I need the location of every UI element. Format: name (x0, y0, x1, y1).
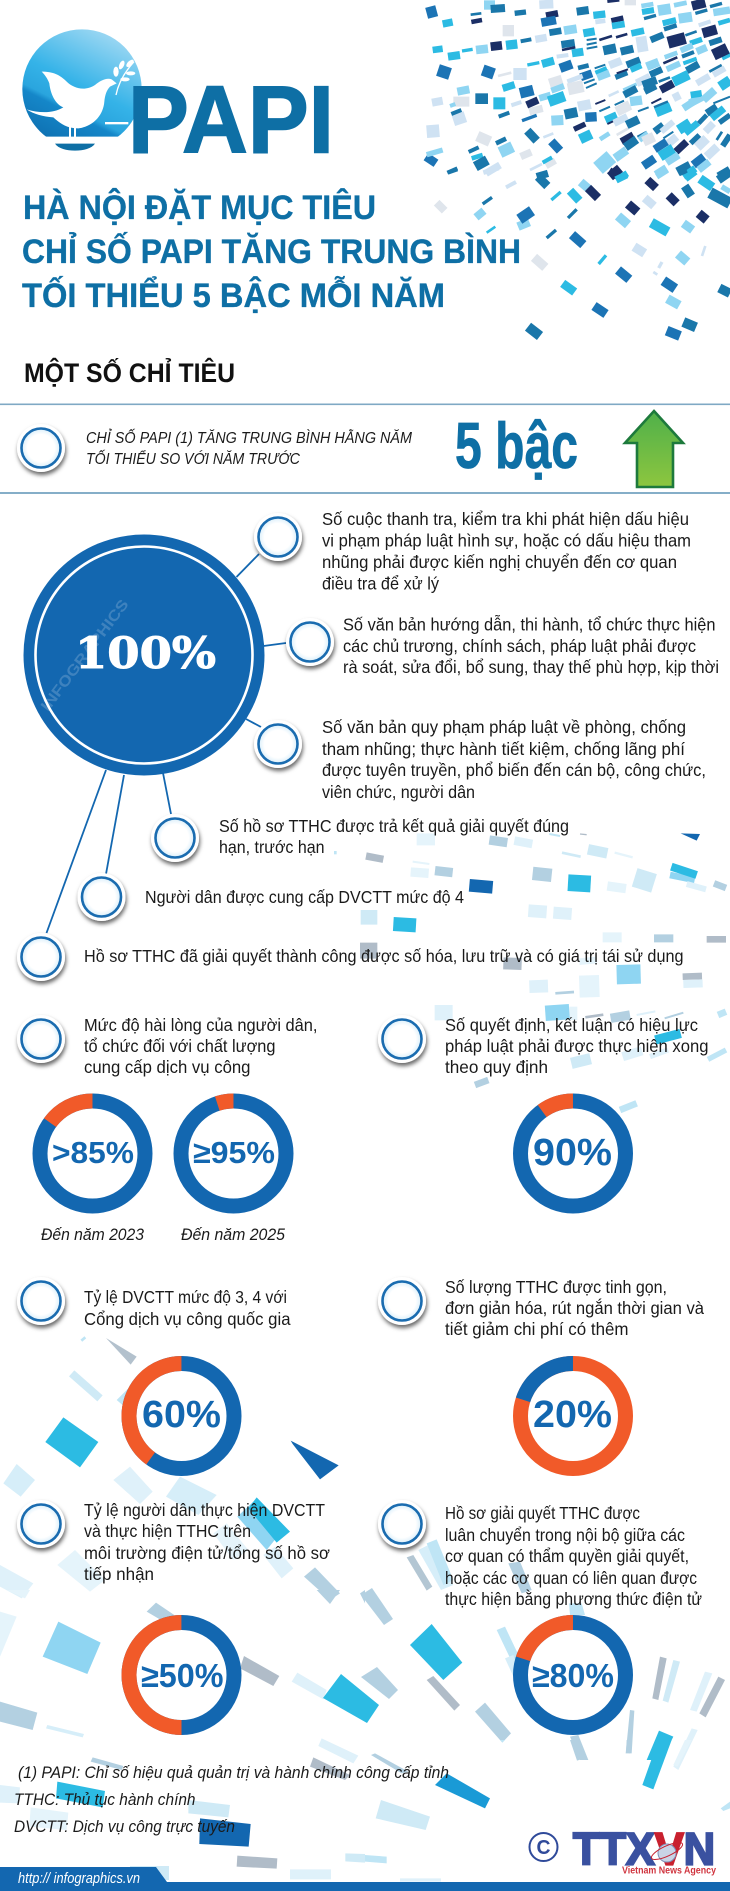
footer bar (0, 1867, 730, 1891)
text (445, 1277, 704, 1339)
icon: copyright (530, 1833, 558, 1861)
text: Hồ sơ TTHC đã giải quyết thành công được số hóa, lưu trữ và có giá trị tái sử dụng (84, 946, 684, 966)
icon: bullet (378, 1015, 426, 1063)
donut: ≥95%: ≥95% (193, 1135, 275, 1170)
text: Mức độ hài lòng của người dân, (84, 1015, 318, 1035)
background: middle pale rectangles (334, 833, 726, 1110)
text: tổ chức đối với chất lượng (84, 1036, 276, 1056)
icon: bullet (378, 1500, 426, 1548)
text: điều tra để xử lý (322, 574, 439, 594)
text: papi target: CHỈ SỐ PAPI (1) TĂNG TRUNG BÌNH HẰNG NĂM (86, 428, 413, 447)
text: cung cấp dịch vụ công (84, 1057, 250, 1077)
section heading: MỘT SỐ CHỈ TIÊU (24, 356, 235, 388)
panel: simplified procedures (378, 1277, 704, 1482)
text: Số lượng TTHC được tinh gọn, (445, 1277, 667, 1297)
text: và thực hiện TTHC trên (84, 1521, 251, 1541)
panel: papi target row (17, 409, 683, 487)
donut: ≥95% (167, 1087, 300, 1220)
text: môi trường điện tử/tổng số hồ sơ (84, 1543, 330, 1563)
donut: 20% (507, 1350, 639, 1482)
text: hạn, trước hạn (219, 837, 324, 857)
background: lower right pieces (323, 1539, 725, 1770)
text: theo quy định (445, 1057, 548, 1077)
panel: citizen satisfaction (17, 1015, 318, 1244)
donut: 90%: 90% (533, 1132, 612, 1174)
donut: ≥80% (507, 1609, 639, 1741)
text: Số quyết định, kết luận có hiệu lực (445, 1015, 698, 1035)
panel: 100 percent hub (24, 534, 286, 933)
text: tiết giảm chi phí có thêm (445, 1319, 628, 1339)
text (84, 1500, 330, 1584)
item: digitised records (17, 933, 684, 981)
text: tham nhũng; thực hành tiết kiệm, chống lãng phí (322, 739, 685, 759)
text: Người dân được cung cấp DVCTT mức độ 4 (145, 887, 464, 907)
icon: bullet (254, 513, 302, 561)
donut: ≥50%: ≥50% (141, 1657, 224, 1694)
icon: globe (649, 1839, 685, 1863)
item: legal documents (254, 717, 706, 802)
donut: ≥80%: ≥80% (532, 1657, 614, 1694)
footnotes: DVCTT: Dịch vụ công trực tuyến (14, 1817, 235, 1836)
text: Hồ sơ giải quyết TTHC được (445, 1503, 640, 1523)
text (84, 1015, 318, 1077)
background: bottom right pieces (365, 1740, 730, 1882)
text: pháp luật phải được thực hiện xong (445, 1036, 708, 1056)
background: lower left shards (0, 1337, 340, 1600)
donut: ≥50% (129, 1622, 234, 1728)
panel: online services on national portal (17, 1277, 291, 1489)
text: Tỷ lệ người dân thực hiện DVCTT (84, 1500, 325, 1520)
background: top right particle cluster (426, 0, 730, 180)
text: các chủ trương, chính sách, pháp luật phải được (343, 636, 696, 656)
title: TỐI THIỂU 5 BẬC MỖI NĂM (22, 276, 445, 315)
donut: >85% (19, 1080, 166, 1227)
footnotes: TTHC: Thủ tục hành chính (14, 1790, 196, 1809)
text (219, 816, 569, 857)
title: HÀ NỘI ĐẶT MỤC TIÊU (23, 188, 376, 227)
text: luân chuyển trong nội bộ giữa các (445, 1525, 685, 1545)
icon: bullet (151, 814, 199, 862)
item: guidance documents (286, 614, 719, 677)
text: thực hiện bằng phương thức điện tử (445, 1588, 702, 1609)
donut: 60%: 60% (142, 1394, 221, 1436)
item: inspections (254, 509, 691, 594)
text: papi target (86, 428, 413, 468)
connector lines (46, 554, 286, 933)
item: on-time records (151, 814, 569, 862)
icon: bullet (254, 720, 302, 768)
text: papi target: TỐI THIỂU SO VỚI NĂM TRƯỚC (86, 449, 300, 468)
panel: electronic transfer of records (378, 1500, 702, 1741)
text: viên chức, người dân (322, 782, 475, 802)
text (445, 1503, 702, 1609)
donut: 60% (108, 1343, 255, 1489)
donut: 90% (500, 1080, 646, 1227)
panel: citizens using online services (17, 1500, 330, 1728)
caption: 2023: Đến năm 2023 (41, 1225, 144, 1244)
footnotes: (1) PAPI: Chỉ số hiệu quả quản trị và hành chính công cấp tỉnh (18, 1763, 449, 1782)
text: tiếp nhận (84, 1564, 154, 1584)
text: Tỷ lệ DVCTT mức độ 3, 4 với (84, 1287, 287, 1307)
big circle (24, 534, 264, 776)
text: Số hồ sơ TTHC được trả kết quả giải quyết đúng (219, 816, 569, 836)
icon: bullet (378, 1277, 426, 1325)
background: lower left pieces (0, 1590, 365, 1880)
watermark: INFOGRAPHICS (38, 596, 132, 714)
icon: bullet (17, 1277, 65, 1325)
donut: 20%: 20% (533, 1394, 612, 1436)
icon: bullet (286, 618, 334, 666)
icon: bullet (17, 1015, 65, 1063)
text: Số văn bản hướng dẫn, thi hành, tổ chức thực hiện (343, 614, 716, 634)
title (22, 188, 521, 315)
text: đơn giản hóa, rút ngắn thời gian và (445, 1297, 704, 1318)
footnotes (14, 1763, 449, 1836)
value: 100%: 100% (75, 629, 216, 679)
text (343, 614, 719, 677)
footer link: http:// infographics.vn (18, 1870, 140, 1887)
text: cơ quan có thẩm quyền giải quyết, (445, 1546, 689, 1566)
logo: TTXVN (530, 1824, 716, 1876)
icon: bullet (17, 1500, 65, 1548)
text (84, 1287, 291, 1329)
text: Số văn bản quy phạm pháp luật về phòng, chống (322, 717, 686, 737)
background: scattered diamonds under the cluster (437, 168, 730, 336)
icon: green up arrow (625, 411, 683, 487)
wordmark: PAPI: PAPI (128, 66, 334, 174)
text (445, 1015, 708, 1077)
logo: PAPI dove and wordmark (22, 29, 329, 154)
text (322, 509, 691, 594)
wordmark: TTXVN: TTXVN (573, 1824, 715, 1874)
item: level 4 online services (78, 873, 464, 921)
text (322, 717, 706, 802)
value: 5 bậc: 5 bậc (455, 409, 578, 482)
donut: >85%: >85% (52, 1135, 134, 1170)
caption: 2025: Đến năm 2025 (181, 1225, 285, 1244)
icon: bullet (78, 873, 126, 921)
text: Cổng dịch vụ công quốc gia (84, 1309, 291, 1329)
icon: copyright: C (536, 1837, 550, 1859)
text: vi phạm pháp luật hình sự, hoặc có dấu hiệu tham (322, 530, 691, 550)
panel: legal decisions (378, 1015, 708, 1227)
icon: bullet (17, 933, 65, 981)
icon: bullet (17, 424, 65, 472)
icon: dove in blue circle (22, 29, 142, 151)
title: CHỈ SỐ PAPI TĂNG TRUNG BÌNH (22, 232, 521, 271)
text: Số cuộc thanh tra, kiểm tra khi phát hiện dấu hiệu (322, 509, 689, 529)
text: được tuyên truyền, phổ biến đến cán bộ, công chức, (322, 760, 706, 780)
text: nhũng phải được kiến nghị chuyển đến cơ quan (322, 552, 677, 572)
text: hoặc các cơ quan có liên quan được (445, 1568, 697, 1588)
